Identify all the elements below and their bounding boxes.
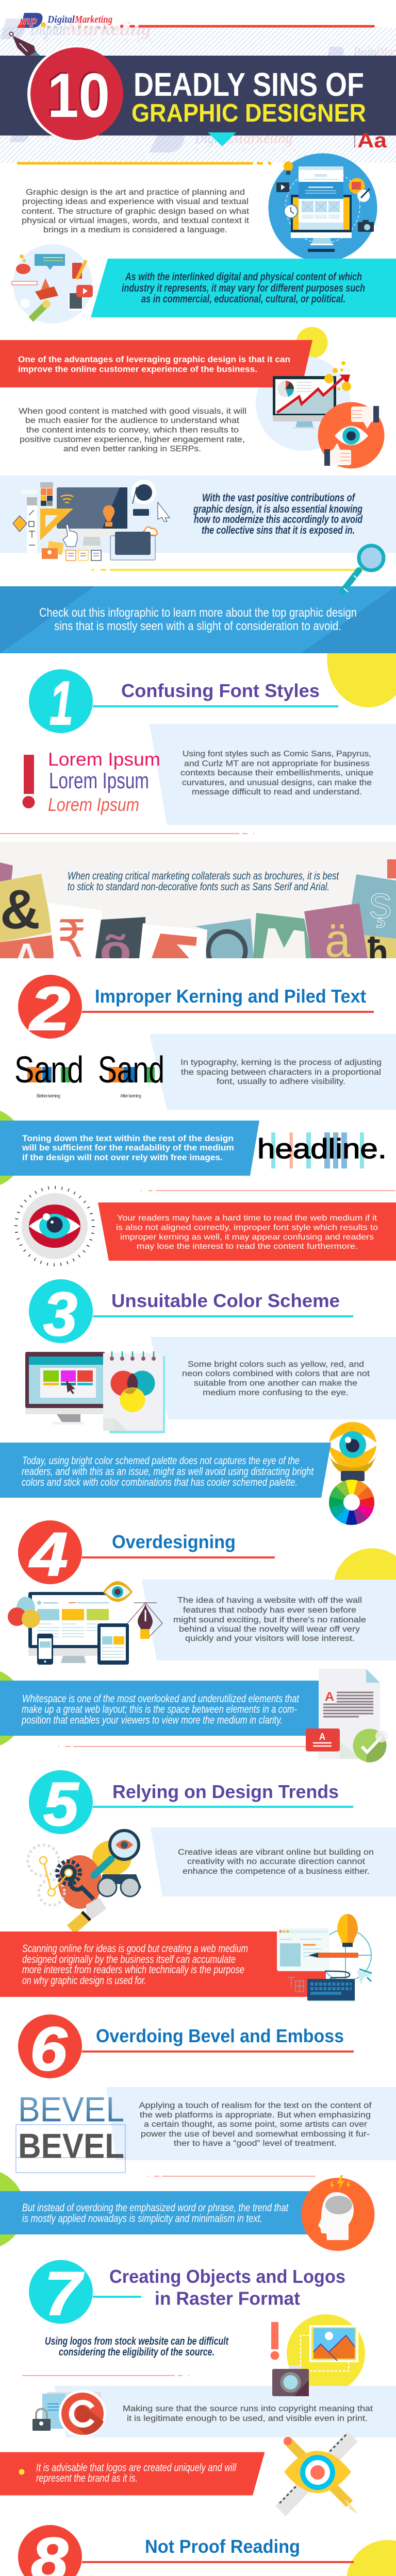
illustration: headline kerning sample: headline. (257, 1133, 387, 1164)
title (131, 66, 366, 127)
paragraph: intro: Graphic design is the art and practice of planning and (26, 188, 245, 197)
green circle accent (0, 1108, 25, 1188)
panel: sin 4 explanation: features that nobody has ever seen before (183, 1606, 356, 1615)
panel: sin 7 explanation: Making sure that the source runs into copyright meaning that (123, 2404, 373, 2413)
number badge 3 (29, 1279, 93, 1349)
green circle accent (0, 2169, 25, 2249)
illustration: color scheme monitor and notebook (25, 1351, 165, 1433)
panel: sin 4 explanation (142, 1580, 396, 1660)
number badge 6 (18, 2014, 82, 2083)
paragraph: good content and visuals: the content intends to convey, which then results to (26, 426, 239, 435)
title band (0, 56, 396, 135)
yellow circle accent (334, 1548, 396, 1625)
sin 8 heading: Not Proof Reading (145, 2536, 300, 2557)
paragraph: intro: projecting ideas and experience with visual and textual (22, 197, 249, 206)
sin 2 heading (18, 974, 374, 1043)
panel: sin 2 explanation (150, 1034, 396, 1110)
panel: sin 5 explanation: creativity with no accurate direction cannot (187, 1857, 366, 1866)
callout: red band (0, 340, 312, 387)
callout: blue band, today (0, 1443, 331, 1498)
sin 1 heading (29, 669, 338, 738)
sin 2 heading: Improper Kerning and Piled Text (95, 986, 366, 1007)
panel: light blue contributions band (0, 476, 396, 553)
panel: typography collage (0, 842, 396, 958)
header hatched background: PHILIPPINES (195, 147, 295, 153)
text: logos from stock websites (45, 2335, 229, 2358)
panel: sin 4 explanation: behind a visual the novelty will wear off very (179, 1625, 360, 1634)
panel: sin 2 explanation: font, usually to adhere visibility. (217, 1077, 345, 1086)
illustration: responsive devices (8, 1581, 162, 1665)
logo: Digital Marketing Philippines: Digital (47, 14, 75, 25)
header hatched background: Digital Marketing (37, 127, 102, 140)
panel: sin 2 explanation: In typography, kerning is the process of adjusting (180, 1058, 382, 1067)
header hatched background: PHILIPPINES (32, 38, 153, 44)
sample fonts: Lorem Ipsum: Lorem Ipsum (49, 768, 149, 793)
panel: typography collage: & (0, 878, 40, 940)
sin 5 heading (29, 1770, 353, 1839)
panel: sin 5 explanation: Creative ideas are vibrant online but building on (178, 1848, 374, 1857)
logo: Digital Marketing Philippines: mp (20, 14, 37, 27)
panel: sin 6 explanation: the web platforms is appropriate. But when emphasizing (140, 2111, 371, 2120)
sin 4 heading (18, 1520, 275, 1589)
panel: typography collage: õ (100, 927, 131, 974)
illustration: designer workspace (13, 480, 170, 561)
sample fonts: Lorem Ipsum (48, 749, 160, 815)
sample: BEVEL text: BEVEL (18, 2127, 124, 2166)
callout: blue band, simplicity: But instead of overdoing the emphasized word or phrase, the trend that (22, 2202, 289, 2214)
sin 7 heading: Creating Objects and Logos (109, 2266, 345, 2287)
panel: typography collage: ş (369, 877, 392, 928)
illustration: document with checkmark (319, 1669, 380, 1759)
illustration: growth chart monitor (273, 361, 351, 429)
icon: eye, pencil and ruler (278, 2435, 358, 2514)
header hatched background: Marketing (230, 128, 293, 147)
callout: blue band, toning down (0, 1121, 259, 1176)
panel: sin 4 explanation: might sound exciting, but if there's no rationale (173, 1616, 366, 1624)
header hatched background (0, 18, 396, 163)
illustration: digital marketing icons (12, 244, 93, 324)
callout: red band: One of the advantages of leveraging graphic design is that it can (18, 355, 290, 364)
icon: exclamation mark (270, 2322, 279, 2360)
logo: Digital Marketing Philippines (17, 13, 113, 30)
sin 8 heading (18, 2525, 396, 2576)
callout: blue band, simplicity (0, 2191, 315, 2234)
logo: Digital Marketing Philippines: PHILIPPINES (47, 25, 113, 30)
sample fonts: Lorem Ipsum: Lorem Ipsum (48, 794, 139, 815)
header hatched background: Marketing (65, 18, 151, 40)
header hatched background: Digital (194, 128, 231, 147)
text: positive contributions: the collective sins that it is exposed in. (202, 524, 355, 536)
panel: sin 6 explanation: Applying a touch of realism for the text on the content of (139, 2101, 372, 2110)
big number circle: 10 (27, 46, 123, 141)
number badge 4: 4 (29, 1520, 68, 1589)
callout: cyan band (91, 259, 396, 317)
callout: blue band, whitespace (0, 1681, 319, 1736)
paragraph: good content and visuals (19, 407, 246, 453)
number badge 4 (18, 1520, 82, 1589)
icon: Aa type tool: Aa (357, 129, 387, 152)
light blue circle accent (256, 356, 351, 451)
sample fonts: Lorem Ipsum: Lorem Ipsum (48, 749, 160, 770)
sin 3 heading (29, 1279, 353, 1349)
panel: sin 1 explanation: contexts because their embellishments, unique (180, 769, 373, 777)
number badge 7: 7 (44, 2259, 85, 2328)
paragraph: intro: physical or virtual images, words, and textual context it (22, 216, 250, 225)
panel: sin 4 explanation: quickly and your visitors will lose interest. (185, 1634, 355, 1643)
sin 4 heading: Overdesigning (112, 1531, 236, 1552)
callout: red band, readers: Your readers may have a hard time to read the web medium if it (117, 1214, 377, 1223)
sample: BEVEL text (16, 2090, 125, 2173)
panel: sin 1 explanation: and Curlz MT are not appropriate for business (184, 759, 370, 768)
illustration: website design in blue circle (268, 154, 377, 262)
text: logos from stock websites: Using logos from stock website can be difficult (45, 2335, 229, 2347)
illustration: designer workspace: WWW (21, 488, 38, 496)
icon: copyright and lock (32, 2390, 106, 2437)
number badge 8 (18, 2525, 82, 2576)
header hatched background: Digital (29, 18, 66, 40)
callout: blue band, today: Today, using bright color schemed palette does not captures the eye of the (22, 1455, 300, 1467)
panel: sin 1 explanation: Using font styles such as Comic Sans, Papyrus, (183, 750, 371, 758)
panel: sin 6 explanation (106, 2087, 396, 2160)
panel: sin 1 explanation (150, 724, 396, 825)
paragraph: good content and visuals: positive customer experience, higher engagement rate, (20, 435, 245, 444)
illustration: web design workstation (277, 1914, 372, 2002)
sin 6 heading: Overdoing Bevel and Emboss (96, 2025, 344, 2046)
chart: before and after kerning: Before kerning (37, 1093, 60, 1098)
icon: magnifier (342, 546, 384, 592)
sin 3 heading: Unsuitable Color Scheme (111, 1290, 340, 1311)
panel: typography collage: A (13, 936, 40, 976)
callout: blue band, toning down: if the design will not over rely with free images. (22, 1153, 223, 1162)
header hatched background: Digital (353, 45, 380, 59)
sin 6 heading (18, 2014, 354, 2083)
chart: color wheel (333, 1483, 371, 1521)
callout: blue check-out band (0, 586, 396, 653)
callout: blue band, whitespace: Whitespace is one of the most overlooked and underutilized elements that (22, 1693, 300, 1705)
illustration: raster image and camera (272, 2325, 358, 2396)
yellow circle accent (346, 2540, 396, 2576)
callout: blue band, toning down: Toning down the text within the rest of the design (22, 1134, 234, 1143)
big number circle: 10: 10 (47, 60, 110, 130)
callout: blue band, today: readers, and with this as an issue, might as well avoid using distracting bright (22, 1466, 314, 1478)
icon: pen nib (9, 32, 50, 71)
panel: sin 5 explanation (151, 1827, 396, 1896)
panel: typography collage: ħ (368, 929, 388, 975)
icon: red eye with rays (16, 1188, 93, 1265)
number badge 7 (29, 2259, 93, 2328)
callout: red band, scanning: Scanning online for ideas is good but creating a web medium (22, 1943, 248, 1955)
panel: typography collage: ä (325, 914, 351, 967)
sin 7 heading: in Raster Format (155, 2287, 300, 2309)
paragraph: intro (22, 188, 250, 234)
title: GRAPHIC DESIGNER (131, 99, 366, 127)
text: positive contributions (193, 492, 363, 536)
chart: before and after kerning: Sand (14, 1049, 84, 1091)
text: positive contributions: With the vast positive contributions of (202, 492, 356, 504)
yellow circle accent (287, 2314, 365, 2393)
panel: sin 3 explanation: medium more confusing to the eye. (203, 1388, 349, 1397)
big number circle: 10: 10 (46, 59, 108, 129)
callout: blue band, whitespace: make up a great web layout; this is the space between elements in a com- (22, 1703, 297, 1716)
logo: Digital Marketing Philippines: Marketing (74, 14, 112, 25)
number badge 5 (29, 1770, 93, 1839)
panel: sin 7 explanation: it is legitimate enough to be used, and visible even in print. (127, 2414, 368, 2423)
green circle accent (0, 1668, 25, 1749)
panel: sin 3 explanation: neon colors combined with colors that are not (182, 1369, 370, 1378)
illustration: eye with thumbs up and down (318, 402, 385, 469)
illustration: gears, magnifier, binoculars (28, 1831, 141, 1934)
callout: red band, scanning: on why graphic design is used for. (22, 1975, 146, 1987)
panel: typography collage: ₹ (57, 910, 86, 968)
panel: sin 4 explanation: The idea of having a website with off the wall (177, 1596, 362, 1605)
callout: red band, readers: is also not aligned correctly, improper font style which results to (116, 1223, 378, 1232)
callout: red band, scanning (0, 1931, 326, 1997)
number badge 6: 6 (30, 2014, 68, 2083)
number badge 5: 5 (43, 1770, 79, 1839)
paragraph: good content and visuals: be much easier for the audience to understand what (25, 416, 240, 425)
yellow circle accent (296, 327, 328, 359)
illustration: document with checkmark: A (325, 1690, 334, 1704)
chart: before and after kerning (14, 1049, 164, 1098)
sin 7 heading (29, 2259, 345, 2328)
number badge 3: 3 (43, 1280, 77, 1349)
number badge 1: 1 (50, 669, 73, 738)
panel: sin 6 explanation: a certain thought, as some point, some artists can over (144, 2120, 367, 2129)
panel: sin 1 explanation: message difficult to read and understand. (192, 788, 362, 796)
paragraph: good content and visuals: and even better ranking in SERPs. (63, 445, 201, 453)
chart: before and after kerning: After kerning (120, 1093, 141, 1098)
sin 5 heading: Relying on Design Trends (112, 1781, 339, 1802)
panel: sin 3 explanation (151, 1337, 396, 1419)
yellow circle accent (327, 653, 396, 707)
sin 1 heading: Confusing Font Styles (121, 680, 320, 701)
callout: blue band, toning down: will be sufficient for the readability of the medium (22, 1143, 234, 1153)
callout: red band, advisable (0, 2452, 265, 2496)
callout: red band: improve the online customer experience of the business. (18, 365, 257, 374)
panel: sin 6 explanation: power the use of bevel and somewhat embossing it fur- (141, 2130, 370, 2139)
icon: text button and check: A (319, 1732, 325, 1742)
callout: blue check-out band: sins that is mostly seen with a slight of consideration to avoid. (54, 619, 341, 633)
number badge 2 (18, 974, 82, 1043)
panel: sin 5 explanation: enhance the competence of a business either. (183, 1867, 370, 1876)
icon: exclamation mark (23, 755, 35, 808)
number badge 2: 2 (29, 974, 70, 1043)
text: logos from stock websites: considering the eligibility of the source. (59, 2346, 214, 2358)
callout: blue band, today: colors and stick with color combinations that has cooler schemed palette. (22, 1477, 298, 1488)
callout: red band, readers (98, 1202, 396, 1261)
callout: red band, advisable: It is advisable that logos are created uniquely and will (36, 2462, 237, 2474)
paragraph: intro: content. The structure of graphic design based on what (22, 207, 250, 216)
panel: sin 3 explanation: suitable from one another can make the (194, 1379, 357, 1388)
callout: blue band, whitespace: position that enables your viewers to view more the medium in clarity. (21, 1715, 283, 1726)
chart: before and after kerning: Sand (98, 1049, 164, 1091)
callout: red band, readers: may lose the interest to read the content furthermore. (137, 1242, 358, 1251)
panel: sin 6 explanation: ther to have a “good” level of treatment. (174, 2139, 337, 2148)
panel: sin 7 explanation (54, 2386, 396, 2437)
panel: sin 3 explanation: Some bright colors such as yellow, red, and (188, 1360, 364, 1369)
paragraph: intro: brings in a medium is considered a language. (43, 226, 227, 234)
callout: red band, advisable: represent the brand as it is. (36, 2472, 138, 2484)
panel: sin 2 explanation: the spacing between characters in a proportional (181, 1068, 381, 1077)
number badge 1 (29, 669, 93, 738)
icon: head with brain (301, 2175, 374, 2251)
callout: blue band, simplicity: is mostly applied nowadays is simplicity and minimalism in text. (22, 2213, 262, 2225)
icon: text button and check (306, 1728, 388, 1762)
callout: red band, scanning: more interest from readers which technically is the purpose (22, 1964, 244, 1976)
callout: red band, scanning: designed originally by the business itself can accumulate (22, 1954, 236, 1965)
callout: red band, readers: improper kerning as well, it may appear confusing and readers (120, 1233, 374, 1242)
sample: BEVEL text: BEVEL (18, 2090, 124, 2129)
icon: eye light bulb (327, 1406, 378, 1481)
arrow: title pointer (208, 132, 236, 146)
paragraph: good content and visuals: When good content is matched with good visuals, it will (19, 407, 246, 416)
panel: sin 1 explanation: curvatures, and unusual designs, can make the (182, 778, 372, 787)
panel: typography collage: to stick to standard non-decorative fonts such as Sans Serif and Arial. (68, 881, 329, 893)
